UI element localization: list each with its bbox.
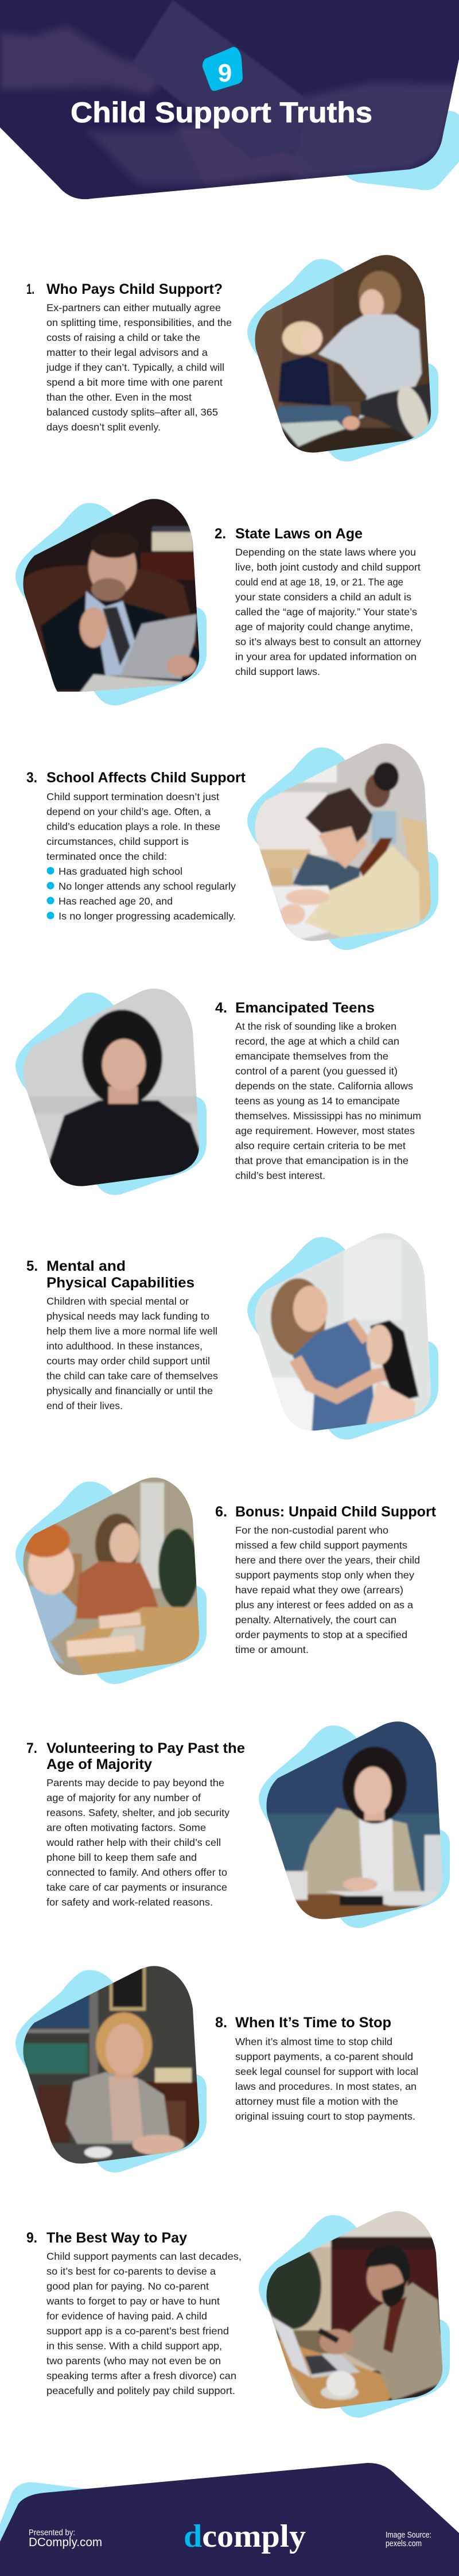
body text: wants to forget to pay or have to hunt <box>46 2295 220 2307</box>
body text: child’s best interest. <box>235 1170 325 1181</box>
body text: penalty. Alternatively, the court can <box>235 1614 396 1625</box>
body text: laws and procedures. In most states, an <box>235 2081 417 2092</box>
body text: Depending on the state laws where you <box>235 546 416 558</box>
heading number 2: 2. <box>215 526 226 542</box>
header accent shape <box>344 86 459 190</box>
body text: age of majority could change anytime, <box>235 621 413 633</box>
body text: have repaid what they owe (arrears) <box>235 1584 403 1596</box>
badge: number 9: 9 <box>218 59 232 87</box>
body text: are often motivating factors. Some <box>46 1822 206 1833</box>
photo: woman and boy at computer <box>23 1477 200 1675</box>
heading number 5: 5. <box>26 1258 38 1274</box>
presented by credit: DComply.com <box>29 2536 102 2549</box>
body text <box>46 2251 242 2396</box>
logo: dcomply: dcomply <box>184 2519 306 2554</box>
body text: seek legal counsel for support with local <box>235 2066 418 2077</box>
header photo: hands exchanging money <box>0 0 459 207</box>
body text: age of majority for any number of <box>46 1792 201 1803</box>
body text: speaking terms after a fresh divorce) can <box>46 2370 236 2381</box>
body text: Parents may decide to pay beyond the <box>46 1777 224 1789</box>
body text: order payments to stop at a specified <box>235 1629 407 1640</box>
bullet list: Has graduated high school <box>59 866 182 877</box>
heading: Volunteering to Pay Past the <box>46 1740 245 1756</box>
heading number 4: 4. <box>215 1000 227 1016</box>
body text: support payments stop only when they <box>235 1569 414 1581</box>
body text <box>235 1021 421 1181</box>
heading number 9: 9. <box>26 2230 37 2246</box>
body text: When it’s almost time to stop child <box>235 2036 392 2047</box>
body text: judge if they can’t. Typically, a child will <box>46 362 224 373</box>
panel: section 5 mental and physical <box>26 1223 442 1446</box>
body text: reasons. Safety, shelter, and job security <box>46 1807 230 1818</box>
body text: would rather help with their child’s cell <box>46 1837 221 1848</box>
body text: the child can take care of themselves <box>46 1370 218 1382</box>
body text: in your area for updated information on <box>235 651 417 662</box>
heading: When It’s Time to Stop <box>235 2015 391 2031</box>
photo blob accent 7 <box>259 1725 450 1928</box>
presented by credit <box>29 2528 102 2549</box>
panel: section 9 best way to pay <box>26 2211 450 2418</box>
body text: could end at age 18, 19, or 21. The age <box>235 576 403 588</box>
body text: balanced custody splits–after all, 365 <box>46 406 218 418</box>
heading: Mental and <box>46 1258 126 1274</box>
body text: themselves. Mississippi has no minimum <box>235 1110 421 1122</box>
body text: in this sense. With a child support app, <box>46 2340 222 2352</box>
photo: man reading document <box>23 499 200 692</box>
body text: teens as young as 14 to emancipate <box>235 1095 400 1107</box>
body text: days doesn’t split evenly. <box>46 421 161 433</box>
body text: depend on your child’s age. Often, a <box>46 806 211 817</box>
body text: end of their lives. <box>46 1400 123 1411</box>
body text <box>46 302 232 433</box>
header banner <box>0 0 459 207</box>
body text: Child support termination doesn’t just <box>46 791 219 802</box>
panel: section 1 who pays <box>26 247 442 465</box>
body text: circumstances, child support is <box>46 836 189 847</box>
heading: Bonus: Unpaid Child Support <box>235 1504 437 1520</box>
body text: support payments, a co-parent should <box>235 2051 413 2062</box>
bullet list: Has reached age 20, and <box>59 895 173 907</box>
body text: called the “age of majority.” Your state’s <box>235 606 417 618</box>
body text: here and there over the years, their child <box>235 1554 420 1566</box>
image source credit <box>386 2531 431 2548</box>
heading: Physical Capabilities <box>46 1275 195 1291</box>
body text <box>235 546 421 677</box>
bullet list: Is no longer progressing academically. <box>59 910 236 922</box>
body text: costs of raising a child or take the <box>46 332 200 343</box>
body text: time or amount. <box>235 1644 309 1655</box>
body text: phone bill to keep them safe and <box>46 1852 197 1863</box>
bullet list <box>47 866 236 922</box>
body text: plus any interest or fees added on as a <box>235 1599 413 1611</box>
panel: section 4 emancipated teens <box>6 979 421 1202</box>
photo: attorney at desk <box>23 1966 200 2164</box>
body text: that prove that emancipation is in the <box>235 1155 409 1166</box>
heading <box>46 1258 195 1291</box>
panel: section 7 volunteering <box>26 1721 450 1928</box>
panel: section 3 school <box>26 735 442 959</box>
heading: The Best Way to Pay <box>46 2230 187 2246</box>
body text: good plan for paying. No co-parent <box>46 2280 209 2292</box>
heading number 8: 8. <box>215 2015 227 2031</box>
footer accent shape <box>0 2482 86 2548</box>
body text: depends on the state. California allows <box>235 1080 413 1092</box>
body text: Ex-partners can either mutually agree <box>46 302 221 313</box>
heading <box>46 1740 245 1772</box>
body text: For the non-custodial parent who <box>235 1524 388 1536</box>
panel: section 2 state laws <box>6 491 421 715</box>
body text <box>46 1777 230 1908</box>
body text: connected to family. And others offer to <box>46 1867 227 1878</box>
photo: boy studying in class <box>255 743 431 941</box>
body text <box>46 1295 218 1411</box>
photo blob accent 6 <box>15 1481 207 1684</box>
photo blob accent 3 <box>247 747 438 950</box>
body text <box>235 1524 420 1655</box>
footer <box>0 2463 459 2576</box>
heading: School Affects Child Support <box>46 770 246 786</box>
panel: section 8 when to stop <box>15 1966 418 2172</box>
body text: two parents (who may not even be on <box>46 2355 221 2366</box>
photo blob accent 1 <box>247 259 438 461</box>
photo blob accent 8 <box>15 1970 207 2172</box>
body text: original issuing court to stop payments. <box>235 2111 415 2122</box>
photo: woman working at desk <box>266 1721 443 1919</box>
body text: into adulthood. In these instances, <box>46 1340 203 1352</box>
photo: mother and child <box>255 255 431 452</box>
body text: matter to their legal advisors and a <box>46 347 208 358</box>
body text: child support laws. <box>235 666 320 677</box>
heading number 7: 7. <box>26 1740 37 1756</box>
heading number 6: 6. <box>215 1504 227 1520</box>
badge: number 9 <box>203 47 243 91</box>
body text: on splitting time, responsibilities, and the <box>46 317 232 328</box>
body text: At the risk of sounding like a broken <box>235 1021 396 1032</box>
body text <box>46 791 220 862</box>
body text: take care of car payments or insurance <box>46 1881 227 1893</box>
title: Child Support Truths <box>71 96 372 129</box>
image source credit: pexels.com <box>386 2539 422 2548</box>
body text: live, both joint custody and child support <box>235 561 421 573</box>
body text: attorney must file a motion with the <box>235 2096 398 2107</box>
heading number 1: 1. <box>26 281 34 297</box>
body text: record, the age at which a child can <box>235 1035 399 1047</box>
heading number 3: 3. <box>26 770 37 786</box>
body text: help them live a more normal life well <box>46 1325 217 1337</box>
heading: Age of Majority <box>46 1756 152 1772</box>
body text <box>235 2036 418 2122</box>
photo blob accent 5 <box>247 1237 438 1440</box>
panel: section 6 unpaid child support <box>6 1467 437 1690</box>
body text: for safety and work-related reasons. <box>46 1896 213 1908</box>
body text: courts may order child support until <box>46 1355 210 1367</box>
body text: than the other. Even in the most <box>46 391 192 403</box>
image source credit: Image Source: <box>386 2531 431 2540</box>
body text: terminated once the child: <box>46 851 167 862</box>
photo blob accent 2 <box>15 503 207 705</box>
body text: Children with special mental or <box>46 1295 189 1307</box>
footer background <box>0 2463 459 2576</box>
heading: Who Pays Child Support? <box>46 281 223 297</box>
body text: child’s education plays a role. In these <box>46 821 220 832</box>
body text: peacefully and politely pay child support. <box>46 2385 235 2396</box>
body text: support app is a co-parent’s best friend <box>46 2325 229 2337</box>
photo: teen in black hoodie <box>23 988 200 1186</box>
heading: Emancipated Teens <box>235 1000 375 1016</box>
body text: age requirement. However, most states <box>235 1125 415 1136</box>
body text: physical needs may lack funding to <box>46 1310 209 1322</box>
body text: so it’s best for co-parents to devise a <box>46 2265 216 2277</box>
body text: also require certain criteria to be met <box>235 1140 406 1151</box>
body text: control of a parent (you guessed it) <box>235 1065 398 1077</box>
body text: spend a bit more time with one parent <box>46 377 223 388</box>
photo: man using phone at laptop <box>266 2211 443 2408</box>
body text: emancipate themselves from the <box>235 1050 388 1062</box>
photo blob accent 9 <box>259 2215 450 2418</box>
body text: physically and financially or until the <box>46 1385 213 1396</box>
presented by credit: Presented by: <box>29 2528 75 2538</box>
body text: missed a few child support payments <box>235 1539 407 1551</box>
photo blob accent 4 <box>15 992 207 1195</box>
heading: State Laws on Age <box>235 526 363 542</box>
bullet list: No longer attends any school regularly <box>59 880 236 892</box>
body text: your state considers a child an adult is <box>235 591 411 603</box>
body text: Child support payments can last decades, <box>46 2251 242 2262</box>
body text: so it’s always best to consult an attorney <box>235 636 421 647</box>
body text: for evidence of having paid. A child <box>46 2310 207 2322</box>
photo: mother fixing daughter's hair <box>255 1233 431 1430</box>
